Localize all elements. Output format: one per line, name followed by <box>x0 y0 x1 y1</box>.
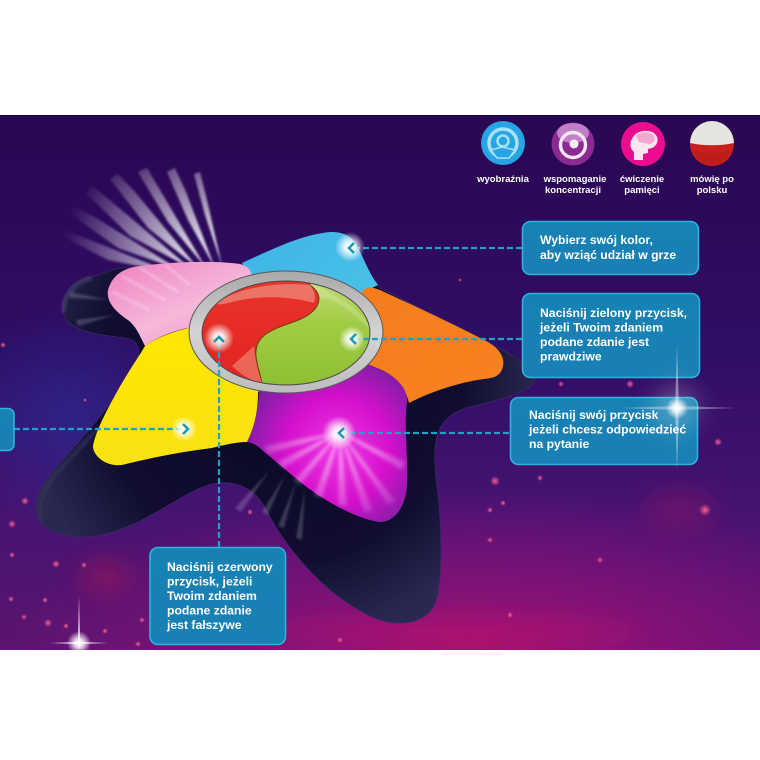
callout: red button: jest fałszywe <box>166 618 242 632</box>
background particles <box>0 278 722 647</box>
callout: your button <box>510 398 698 464</box>
label: concentration: wspomaganie <box>543 174 606 185</box>
star sparkle right <box>620 345 736 470</box>
background panel <box>0 115 760 650</box>
callout: choose colour: Wybierz swój kolor, <box>540 233 653 247</box>
label: imagination: wyobraźnia <box>476 174 530 185</box>
icon: memory <box>621 122 665 166</box>
callout: red button: Naciśnij czerwony <box>167 560 273 574</box>
callout: choose colour <box>522 222 698 274</box>
segment: yellow <box>93 328 286 465</box>
callout: green button <box>522 294 700 378</box>
callout: left edge box <box>0 408 14 450</box>
callout: your button: jeżeli chcesz odpowiedzieć <box>528 422 686 436</box>
segment: magenta <box>247 331 407 522</box>
central button ring <box>189 271 383 393</box>
label: memory: pamięci <box>624 185 660 196</box>
icon: imagination <box>481 121 525 165</box>
glow points <box>171 232 365 450</box>
segment: orange <box>286 288 503 403</box>
label: memory: ćwiczenie <box>620 174 664 185</box>
callout dashed lines <box>14 248 522 547</box>
callout: green button: prawdziwe <box>540 350 602 364</box>
callout: your button: Naciśnij swój przycisk <box>529 408 659 422</box>
callout: choose colour: aby wziąć udział w grze <box>540 248 676 262</box>
callout: green button: Naciśnij zielony przycisk, <box>540 306 687 320</box>
callout: red button: podane zdanie <box>167 604 252 618</box>
icon: Polish flag <box>690 121 734 166</box>
segment: blue <box>242 232 378 331</box>
label: Polish: polsku <box>697 185 727 196</box>
arrowheads <box>183 243 356 438</box>
callout: red button <box>150 548 286 644</box>
callout: red button: Twoim zdaniem <box>167 589 257 603</box>
green button <box>256 284 370 384</box>
callout: green button: podane zdanie jest <box>540 335 649 349</box>
icon: concentration <box>552 122 594 166</box>
callout: your button: na pytanie <box>529 437 589 451</box>
red button <box>202 282 320 382</box>
star toy base <box>36 240 535 623</box>
callout: red button: przycisk, jeżeli <box>167 574 252 588</box>
light rays behind the pink segment <box>62 168 222 272</box>
label: concentration: koncentracji <box>545 185 601 196</box>
star sparkle bottom <box>50 596 108 650</box>
callout: green button: jeżeli Twoim zdaniem <box>539 320 663 334</box>
segment: pink <box>108 262 286 346</box>
magenta light rays <box>264 432 405 512</box>
label: Polish: mówię po <box>690 174 734 185</box>
